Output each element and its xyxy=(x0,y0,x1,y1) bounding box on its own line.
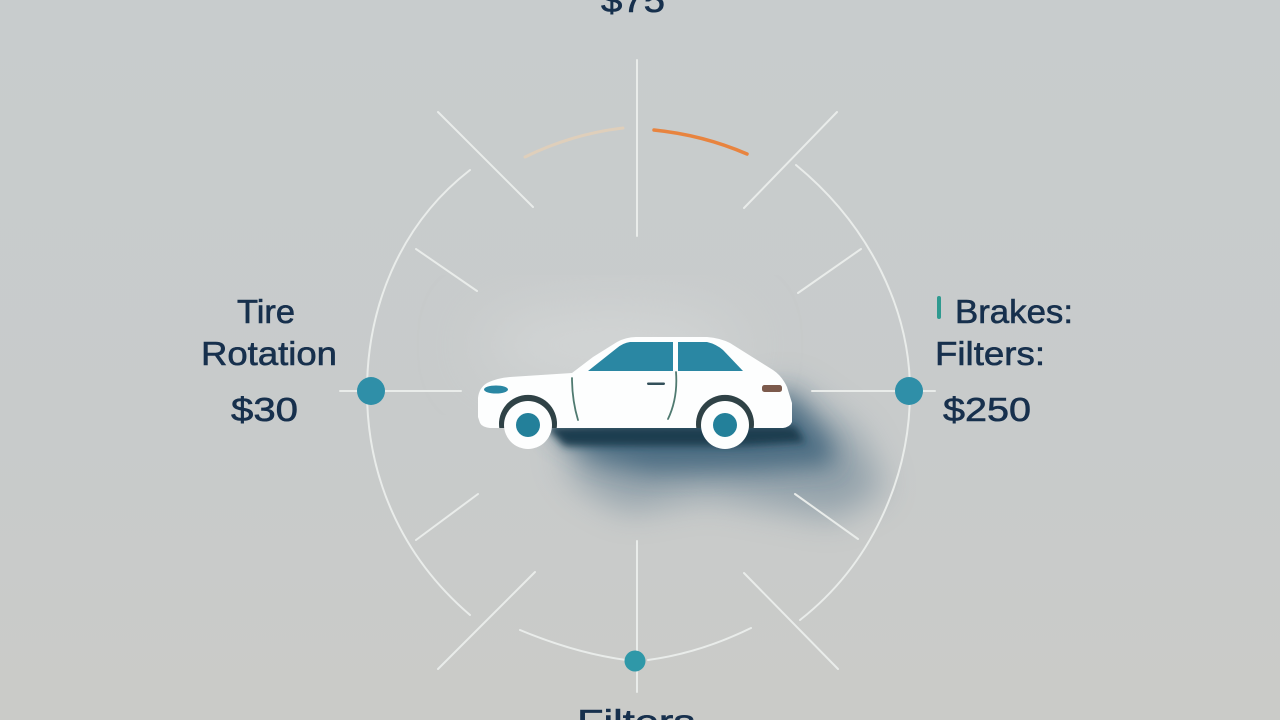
arc: orange accent xyxy=(654,130,747,154)
label: tire rotation xyxy=(201,293,337,428)
wheel: front xyxy=(499,395,557,449)
label: brakes and filters: Brakes: xyxy=(955,293,1073,330)
label: brakes and filters: $250 xyxy=(943,391,1031,428)
car body xyxy=(478,337,792,428)
wheel: rear xyxy=(696,395,754,449)
door lines xyxy=(572,372,676,420)
car shadow xyxy=(545,385,885,518)
label: tire rotation: Tire xyxy=(237,293,295,330)
accent tick xyxy=(937,296,941,319)
label: tire rotation: Rotation xyxy=(201,335,337,372)
door handle xyxy=(647,382,665,385)
tail light xyxy=(762,385,782,392)
node: bottom xyxy=(624,650,646,672)
label: brakes and filters: Filters: xyxy=(935,335,1045,372)
node: left xyxy=(357,377,385,405)
label: brakes and filters xyxy=(935,293,1073,428)
arc: pale orange accent xyxy=(525,128,623,157)
node: right xyxy=(895,377,923,405)
window: rear xyxy=(678,342,743,371)
label: tire rotation: $30 xyxy=(231,391,298,428)
headlight xyxy=(484,386,508,394)
car highlight glow xyxy=(480,310,740,380)
window: front xyxy=(588,342,673,371)
car icon xyxy=(478,337,792,449)
gauge ring and spokes xyxy=(340,60,935,692)
